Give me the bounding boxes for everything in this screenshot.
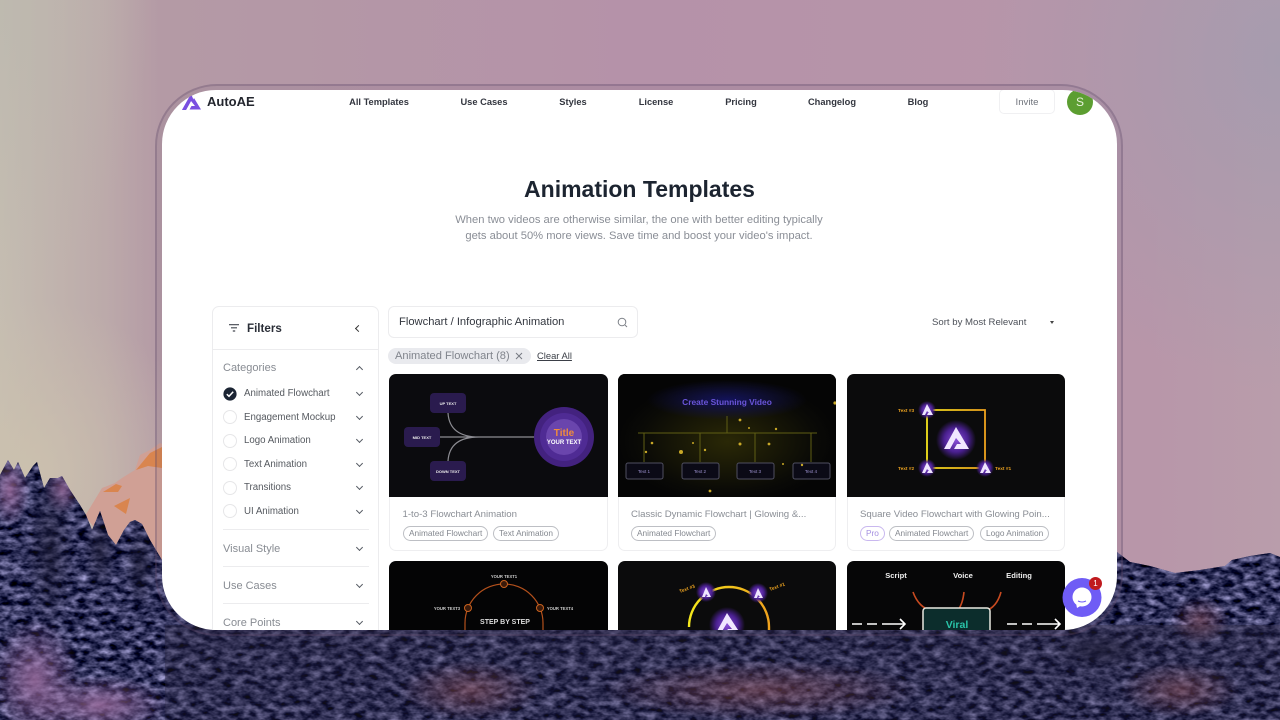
chevron (356, 483, 363, 490)
thumbnail: square flowchart: Text #2 (898, 466, 915, 472)
thumbnail: classic flowchart: Text 4 (805, 469, 818, 474)
thumbnail: classic flowchart (618, 374, 836, 497)
tag: Animated Flowchart (637, 528, 710, 538)
chevron (356, 507, 363, 514)
thumbnail: arc flowchart: Text #1 (769, 582, 786, 593)
chat widget (1062, 577, 1102, 617)
tag (980, 526, 1049, 541)
card title: Classic Dynamic Flowchart | Glowing &... (631, 509, 806, 520)
icon: remove (516, 352, 522, 360)
thumbnail: flowchart (389, 374, 608, 497)
card title: 1-to-3 Flowchart Animation (402, 509, 517, 520)
thumbnail: classic flowchart: Text 2 (694, 469, 707, 474)
sort label: Sort by Most Relevant (932, 317, 1026, 328)
section: Use Cases: Use Cases (223, 580, 277, 592)
checkbox: checked (223, 387, 237, 401)
filter chip (388, 348, 531, 364)
chevron (356, 544, 363, 551)
thumbnail: step by step (389, 561, 608, 630)
chevron (356, 389, 363, 396)
avatar (1067, 89, 1093, 115)
icon: caret (1050, 321, 1054, 324)
card: Viral Flowchart (847, 561, 1065, 720)
category: Transitions: Transitions (244, 482, 291, 493)
tag (493, 526, 559, 541)
tag: Pro (860, 526, 885, 541)
thumbnail: step by step: YOUR TEXT1 (491, 574, 518, 579)
thumbnail: flowchart: UP TEXT (440, 401, 457, 406)
card title: Square Video Flowchart with Glowing Poin... (860, 509, 1050, 520)
search text: Flowchart / Infographic Animation (399, 316, 564, 328)
avatar: S (1076, 95, 1084, 109)
subtitle (455, 214, 823, 242)
notification badge (1089, 577, 1102, 590)
card: Classic Dynamic Flowchart (618, 374, 836, 551)
tag (631, 526, 716, 541)
thumbnail: arc flowchart: Text #3 (679, 584, 696, 595)
thumbnail: step by step: YOUR TEXT4 (547, 606, 574, 611)
icon: collapse (355, 325, 362, 332)
category: Text Animation: Text Animation (244, 459, 307, 470)
category: UI Animation: UI Animation (244, 506, 299, 517)
nav: Use Cases: Use Cases (460, 97, 508, 107)
icon: AutoAE logo (182, 96, 201, 110)
device frame (155, 84, 1123, 636)
filters heading: Filters (247, 322, 282, 335)
chip text: Animated Flowchart (8) (395, 350, 510, 362)
logo (182, 94, 255, 110)
nav: Styles: Styles (559, 97, 587, 107)
thumbnail: classic flowchart: Text 1 (638, 469, 651, 474)
card: Step by Step (389, 561, 608, 720)
chevron (356, 436, 363, 443)
chevron: categories (356, 366, 363, 373)
chevron (356, 618, 363, 625)
title: Animation Templates (524, 176, 755, 202)
mountain (85, 443, 165, 560)
thumbnail: classic flowchart: Create Stunning Video (682, 397, 772, 407)
thumbnail: step by step: STEP BY STEP (480, 619, 530, 626)
checkbox (223, 410, 237, 424)
checkbox (223, 504, 237, 518)
categories heading: Categories (223, 362, 276, 374)
nav: Blog: Blog (908, 97, 928, 107)
thumbnail: square flowchart (847, 374, 1065, 497)
checkbox (223, 481, 237, 495)
background: snowy forest (0, 443, 1280, 720)
checkbox (223, 434, 237, 448)
thumbnail: square flowchart: Text #1 (995, 466, 1012, 472)
panel: website window (162, 90, 1117, 630)
card: 1-to-3 Flowchart (389, 374, 608, 551)
chevron (356, 581, 363, 588)
icon: search (618, 318, 628, 328)
section: Visual Style: Visual Style (223, 543, 280, 555)
chevron (356, 413, 363, 420)
thumbnail: viral flowchart (847, 561, 1065, 630)
chat bubble button (1062, 578, 1102, 617)
notification badge: 1 (1093, 579, 1098, 588)
nav: License: License (639, 97, 673, 107)
tag: Animated Flowchart (409, 528, 482, 538)
panel: filters sidebar (212, 306, 379, 648)
subtitle: gets about 50% more views. Save time and boost your video's impact. (465, 230, 813, 242)
thumbnail: step by step: YOUR TEXT3 (434, 606, 461, 611)
tag (403, 526, 488, 541)
clear all link: Clear All (537, 350, 572, 361)
icon: filter (229, 324, 239, 332)
tag: Text Animation (499, 528, 553, 538)
brand name: AutoAE (207, 94, 255, 109)
thumbnail: classic flowchart: Text 3 (749, 469, 762, 474)
tag (889, 526, 974, 541)
invite button (999, 89, 1055, 114)
thumbnail: viral flowchart: Voice (953, 571, 973, 580)
category: Logo Animation: Logo Animation (244, 435, 311, 446)
thumbnail: square flowchart: Text #3 (898, 408, 915, 414)
category: Animated Flowchart: Animated Flowchart (244, 388, 330, 399)
thumbnail: flowchart: MID TEXT (413, 435, 432, 440)
thumbnail: flowchart: DOWN TEXT (436, 469, 461, 474)
nav: Changelog: Changelog (808, 97, 856, 107)
card: Square Video Flowchart (847, 374, 1065, 551)
thumbnail: flowchart: Title (554, 428, 575, 439)
thumbnail: flowchart: YOUR TEXT (547, 440, 581, 446)
section: Core Points: Core Points (223, 617, 280, 629)
thumbnail: viral flowchart: Editing (1006, 571, 1032, 580)
chevron (356, 460, 363, 467)
tag: Pro: Pro (866, 528, 879, 538)
subtitle: When two videos are otherwise similar, the one with better editing typically (455, 214, 823, 226)
nav: Pricing: Pricing (725, 97, 757, 107)
category: Engagement Mockup: Engagement Mockup (244, 412, 336, 423)
card: Arc Flowchart (618, 561, 836, 720)
tag: Animated Flowchart (895, 528, 968, 538)
checkbox (223, 457, 237, 471)
thumbnail: viral flowchart: Script (885, 571, 907, 580)
invite button: Invite (1016, 97, 1038, 108)
nav: All Templates: All Templates (349, 97, 409, 107)
search box (388, 306, 638, 338)
thumbnail: arc flowchart (618, 561, 836, 630)
tag: Logo Animation (986, 528, 1043, 538)
